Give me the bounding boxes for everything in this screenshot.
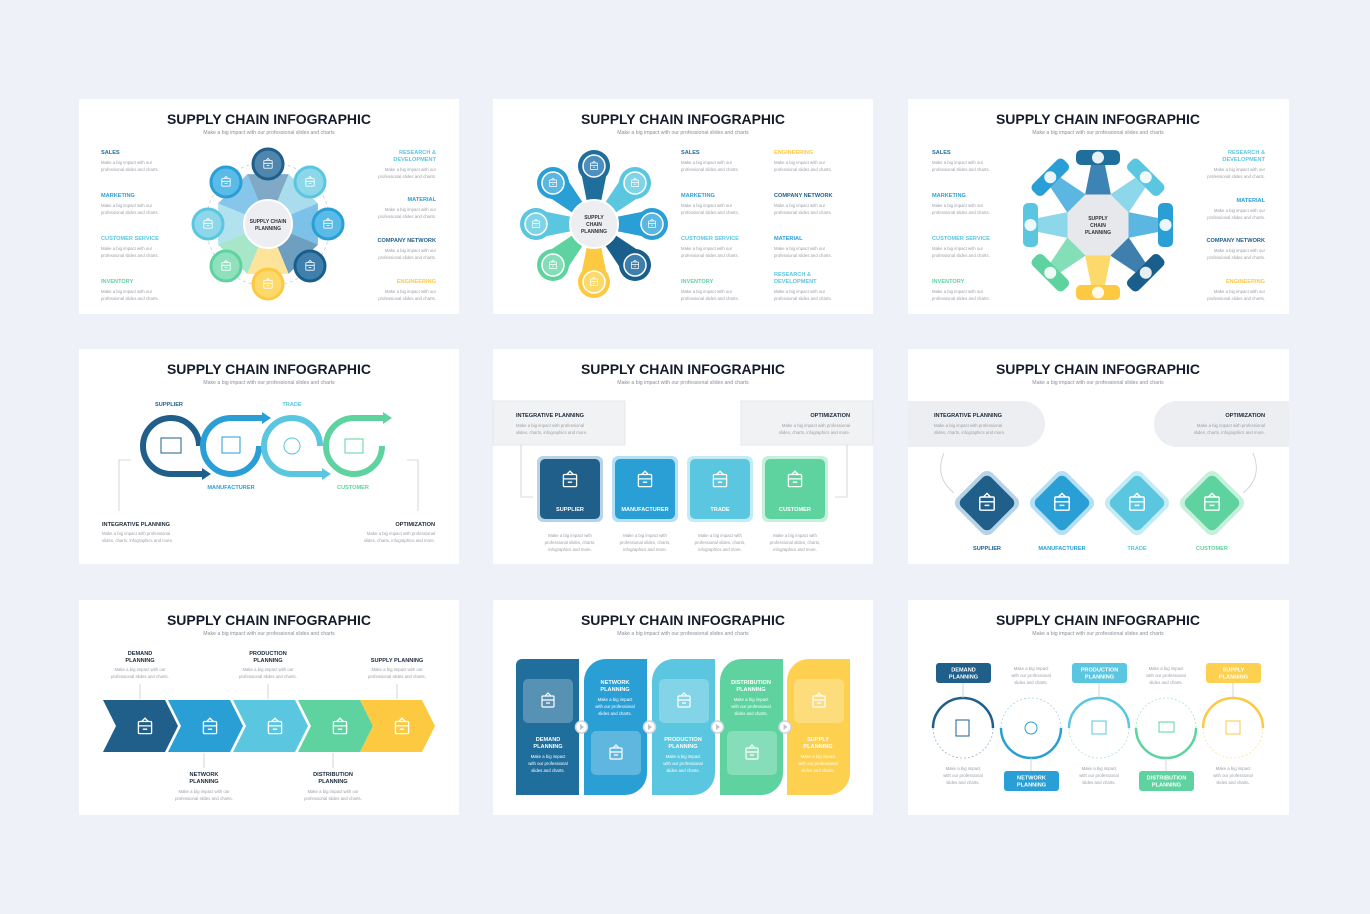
label tags: DEMAND — [951, 668, 976, 674]
columns: Make a big impact — [598, 697, 633, 702]
connector brackets — [119, 460, 418, 511]
columns: DISTRIBUTION — [731, 680, 771, 686]
descriptions: with our professional — [1011, 673, 1051, 678]
left labels: Make a big impact with our — [932, 160, 984, 165]
label column 1: Make a big impact with our — [681, 246, 733, 251]
tile descriptions: professional slides, charts, — [545, 540, 595, 545]
right labels: Make a big impact with our — [385, 248, 437, 253]
title: SUPPLY CHAIN INFOGRAPHIC — [996, 612, 1200, 628]
right labels: RESEARCH & — [399, 150, 436, 156]
columns: with our professional — [798, 761, 838, 766]
label column 2: ENGINEERING — [774, 150, 813, 156]
box: integrative planning: INTEGRATIVE PLANNING — [516, 413, 584, 419]
tile descriptions: professional slides, charts, — [695, 540, 745, 545]
left labels: CUSTOMER SERVICE — [932, 236, 990, 242]
descriptions: with our professional — [1213, 773, 1253, 778]
right labels: Make a big impact with our — [385, 167, 437, 172]
right labels: ENGINEERING — [1226, 279, 1265, 285]
label column 1: MARKETING — [681, 193, 715, 199]
integrative planning text: slides, charts, infographics and more. — [102, 538, 173, 543]
label column 2: Make a big impact with our — [774, 289, 826, 294]
columns: PLANNING — [600, 687, 630, 693]
right labels: professional slides and charts. — [1207, 255, 1265, 260]
right labels: MATERIAL — [1237, 198, 1266, 204]
tile descriptions: Make a big impact with — [623, 533, 667, 538]
optimization text: slides, charts, infographics and more. — [364, 538, 435, 543]
label tags: PLANNING — [949, 674, 978, 680]
left labels: Make a big impact with our — [932, 203, 984, 208]
pill: integrative planning: INTEGRATIVE PLANNING — [934, 413, 1002, 419]
top labels: PRODUCTION — [249, 651, 287, 657]
top labels: SUPPLY PLANNING — [371, 658, 423, 664]
columns: slides and charts. — [801, 768, 835, 773]
play connectors — [576, 721, 791, 733]
right labels — [377, 150, 437, 301]
label tags: SUPPLY — [1223, 668, 1245, 674]
columns: PLANNING — [803, 744, 833, 750]
octagon diagram: PLANNING — [1085, 230, 1111, 236]
top labels: professional slides and charts. — [368, 674, 426, 679]
flower diagram: CHAIN — [586, 222, 602, 228]
box: optimization: slides, charts, infographics and more. — [779, 430, 850, 435]
diamond labels: TRADE — [1127, 546, 1147, 552]
tile descriptions: infographics and more. — [773, 547, 817, 552]
right labels: COMPANY NETWORK — [1206, 238, 1265, 244]
left labels: professional slides and charts. — [101, 296, 159, 301]
right labels: RESEARCH & — [1228, 150, 1265, 156]
wheel diagram: PLANNING — [255, 226, 281, 232]
right labels: professional slides and charts. — [1207, 215, 1265, 220]
subtitle: Make a big impact with our professional slides and charts — [617, 380, 749, 386]
pill: integrative planning: Make a big impact with professional — [934, 423, 1002, 428]
subtitle: Make a big impact with our professional slides and charts — [617, 631, 749, 637]
panel: slide 5 square tiles — [493, 349, 873, 564]
columns: PRODUCTION — [664, 737, 702, 743]
left labels: professional slides and charts. — [101, 210, 159, 215]
title: SUPPLY CHAIN INFOGRAPHIC — [581, 612, 785, 628]
descriptions: Make a big impact — [1149, 666, 1184, 671]
columns: slides and charts. — [734, 711, 768, 716]
label column 1: Make a big impact with our — [681, 289, 733, 294]
step labels: MANUFACTURER — [207, 485, 255, 491]
columns: PLANNING — [533, 744, 563, 750]
bottom labels: professional slides and charts. — [304, 796, 362, 801]
descriptions: Make a big impact — [1014, 666, 1049, 671]
subtitle: Make a big impact with our professional slides and charts — [203, 380, 335, 386]
wheel diagram: SUPPLY CHAIN — [250, 219, 287, 225]
columns: slides and charts. — [531, 768, 565, 773]
label column 1: professional slides and charts. — [681, 210, 739, 215]
title: SUPPLY CHAIN INFOGRAPHIC — [996, 361, 1200, 377]
diamonds — [952, 468, 1247, 538]
flower diagram: SUPPLY — [584, 215, 604, 221]
descriptions: slides and charts. — [946, 780, 980, 785]
tiles: SUPPLIER — [556, 507, 584, 513]
bottom labels: DISTRIBUTION — [313, 772, 353, 778]
label column 2: RESEARCH & — [774, 272, 811, 278]
left labels — [932, 150, 990, 301]
right labels: Make a big impact with our — [1214, 248, 1266, 253]
top labels: professional slides and charts. — [111, 674, 169, 679]
tiles — [537, 456, 828, 522]
descriptions: Make a big impact — [1216, 766, 1251, 771]
descriptions — [943, 666, 1253, 785]
left labels — [101, 150, 159, 301]
subtitle: Make a big impact with our professional slides and charts — [1032, 130, 1164, 136]
left labels: SALES — [932, 150, 951, 156]
columns: Make a big impact — [531, 754, 566, 759]
top labels — [111, 651, 426, 679]
columns: with our professional — [595, 704, 635, 709]
tile descriptions: infographics and more. — [548, 547, 592, 552]
tile descriptions: Make a big impact with — [548, 533, 592, 538]
tile descriptions: Make a big impact with — [698, 533, 742, 538]
columns: with our professional — [528, 761, 568, 766]
label column 1: SALES — [681, 150, 700, 156]
box: integrative planning — [493, 401, 625, 445]
panel: slide 2 flower — [493, 99, 873, 314]
columns: Make a big impact — [734, 697, 769, 702]
descriptions: slides and charts. — [1216, 780, 1250, 785]
pill: optimization — [1154, 401, 1289, 447]
label column 2: COMPANY NETWORK — [774, 193, 833, 199]
label column 2: professional slides and charts. — [774, 253, 832, 258]
step labels — [155, 402, 369, 491]
label column 2: professional slides and charts. — [774, 296, 832, 301]
label column 1 — [681, 150, 739, 301]
bottom labels: NETWORK — [190, 772, 218, 778]
pill: optimization: Make a big impact with professional — [1197, 423, 1265, 428]
label column 1: CUSTOMER SERVICE — [681, 236, 739, 242]
label column 2: professional slides and charts. — [774, 210, 832, 215]
optimization text: OPTIMIZATION — [395, 522, 435, 528]
icons — [161, 437, 363, 454]
columns: Make a big impact — [666, 754, 701, 759]
label tags: PRODUCTION — [1081, 668, 1118, 674]
pill: integrative planning — [908, 401, 1045, 447]
pill: optimization: slides, charts, infographics and more. — [1194, 430, 1265, 435]
top labels: PLANNING — [125, 658, 155, 664]
right labels: Make a big impact with our — [1214, 289, 1266, 294]
right labels: Make a big impact with our — [1214, 167, 1266, 172]
left labels: professional slides and charts. — [932, 210, 990, 215]
left labels: professional slides and charts. — [932, 167, 990, 172]
title: SUPPLY CHAIN INFOGRAPHIC — [581, 361, 785, 377]
label tags: PLANNING — [1152, 782, 1181, 788]
right labels: professional slides and charts. — [378, 214, 436, 219]
label column 2: DEVELOPMENT — [774, 279, 817, 285]
step labels: SUPPLIER — [155, 402, 183, 408]
label tags: DISTRIBUTION — [1147, 776, 1186, 782]
top labels: Make a big impact with our — [242, 667, 294, 672]
label column 2 — [774, 150, 833, 301]
panel: slide 6 diamonds — [908, 349, 1289, 564]
columns: with our professional — [731, 704, 771, 709]
bottom labels: PLANNING — [189, 779, 219, 785]
descriptions: slides and charts. — [1082, 780, 1116, 785]
left labels: INVENTORY — [101, 279, 134, 285]
left labels: professional slides and charts. — [101, 253, 159, 258]
columns — [516, 659, 850, 795]
descriptions: Make a big impact — [946, 766, 981, 771]
diamond labels: SUPPLIER — [973, 546, 1001, 552]
columns: PLANNING — [668, 744, 698, 750]
box: integrative planning: slides, charts, infographics and more. — [516, 430, 587, 435]
columns: slides and charts. — [598, 711, 632, 716]
left labels: Make a big impact with our — [101, 246, 153, 251]
octagon diagram: SUPPLY — [1088, 216, 1108, 222]
right labels: professional slides and charts. — [378, 174, 436, 179]
label tags — [936, 663, 1261, 791]
label tags: PLANNING — [1219, 674, 1248, 680]
panel: slide 9 circle timeline — [908, 600, 1289, 815]
top labels: Make a big impact with our — [371, 667, 423, 672]
subtitle: Make a big impact with our professional slides and charts — [1032, 631, 1164, 637]
right labels: DEVELOPMENT — [393, 157, 437, 163]
panel: slide 1 radial wheel — [79, 99, 459, 314]
title: SUPPLY CHAIN INFOGRAPHIC — [167, 612, 371, 628]
pill: integrative planning: slides, charts, infographics and more. — [934, 430, 1005, 435]
columns: with our professional — [663, 761, 703, 766]
bottom labels: Make a big impact with our — [307, 789, 359, 794]
label tags: PLANNING — [1085, 674, 1114, 680]
label column 1: Make a big impact with our — [681, 160, 733, 165]
descriptions: slides and charts. — [1014, 680, 1048, 685]
right labels: Make a big impact with our — [1214, 208, 1266, 213]
top labels: Make a big impact with our — [114, 667, 166, 672]
bottom labels: Make a big impact with our — [178, 789, 230, 794]
panel: slide 4 circular arrows — [79, 349, 459, 564]
left labels: professional slides and charts. — [932, 253, 990, 258]
panel: slide 8 columns — [493, 600, 873, 815]
columns: PLANNING — [736, 687, 766, 693]
left labels: MARKETING — [101, 193, 135, 199]
label column 2: MATERIAL — [774, 236, 803, 242]
label column 1: Make a big impact with our — [681, 203, 733, 208]
tile descriptions — [545, 533, 820, 552]
left labels: Make a big impact with our — [101, 203, 153, 208]
right labels: COMPANY NETWORK — [377, 238, 436, 244]
left labels: Make a big impact with our — [932, 246, 984, 251]
flower diagram — [520, 150, 668, 298]
descriptions: with our professional — [1146, 673, 1186, 678]
subtitle: Make a big impact with our professional slides and charts — [203, 130, 335, 136]
circles — [933, 698, 1263, 758]
bottom labels: PLANNING — [318, 779, 348, 785]
label column 1: professional slides and charts. — [681, 167, 739, 172]
label column 1: professional slides and charts. — [681, 296, 739, 301]
left labels: SALES — [101, 150, 120, 156]
label column 2: Make a big impact with our — [774, 246, 826, 251]
top labels: professional slides and charts. — [239, 674, 297, 679]
label tags: NETWORK — [1017, 776, 1046, 782]
optimization text — [364, 522, 435, 543]
right labels: professional slides and charts. — [378, 296, 436, 301]
columns: SUPPLY — [807, 737, 829, 743]
diamond labels: CUSTOMER — [1196, 546, 1228, 552]
title: SUPPLY CHAIN INFOGRAPHIC — [167, 361, 371, 377]
left labels: professional slides and charts. — [932, 296, 990, 301]
label column 1: INVENTORY — [681, 279, 714, 285]
tile descriptions: infographics and more. — [698, 547, 742, 552]
left labels: Make a big impact with our — [101, 289, 153, 294]
box: optimization: Make a big impact with professional — [782, 423, 850, 428]
right labels — [1206, 150, 1266, 301]
left labels: MARKETING — [932, 193, 966, 199]
subtitle: Make a big impact with our professional slides and charts — [1032, 380, 1164, 386]
descriptions: slides and charts. — [1149, 680, 1183, 685]
tile descriptions: infographics and more. — [623, 547, 667, 552]
integrative planning text — [102, 522, 173, 543]
descriptions: with our professional — [943, 773, 983, 778]
left labels: Make a big impact with our — [932, 289, 984, 294]
right labels: Make a big impact with our — [385, 289, 437, 294]
tile descriptions: Make a big impact with — [773, 533, 817, 538]
diamond labels: MANUFACTURER — [1038, 546, 1086, 552]
title: SUPPLY CHAIN INFOGRAPHIC — [581, 111, 785, 127]
panel: slide 3 octagon — [908, 99, 1289, 314]
left labels: CUSTOMER SERVICE — [101, 236, 159, 242]
columns: NETWORK — [601, 680, 629, 686]
box: integrative planning: Make a big impact with professional — [516, 423, 584, 428]
step labels: TRADE — [282, 402, 302, 408]
label column 1: professional slides and charts. — [681, 253, 739, 258]
panel: slide 7 chevrons — [79, 600, 459, 815]
optimization text: Make a big impact with professional — [367, 531, 435, 536]
right labels: professional slides and charts. — [1207, 174, 1265, 179]
right labels: DEVELOPMENT — [1222, 157, 1266, 163]
tile descriptions: professional slides, charts, — [620, 540, 670, 545]
right labels: MATERIAL — [408, 197, 437, 203]
label tags: PLANNING — [1017, 782, 1046, 788]
right labels: ENGINEERING — [397, 279, 436, 285]
pill: optimization: OPTIMIZATION — [1225, 413, 1265, 419]
label column 2: professional slides and charts. — [774, 167, 832, 172]
bottom labels: professional slides and charts. — [175, 796, 233, 801]
left labels: Make a big impact with our — [101, 160, 153, 165]
box: optimization: OPTIMIZATION — [810, 413, 850, 419]
right labels: Make a big impact with our — [385, 207, 437, 212]
octagon diagram — [1023, 150, 1173, 300]
subtitle: Make a big impact with our professional slides and charts — [203, 631, 335, 637]
left labels: INVENTORY — [932, 279, 965, 285]
columns: DEMAND — [536, 737, 560, 743]
tiles: CUSTOMER — [779, 507, 811, 513]
flower diagram: PLANNING — [581, 229, 607, 235]
integrative planning text: INTEGRATIVE PLANNING — [102, 522, 170, 528]
step labels: CUSTOMER — [337, 485, 369, 491]
tiles: TRADE — [710, 507, 730, 513]
right labels: professional slides and charts. — [1207, 296, 1265, 301]
title: SUPPLY CHAIN INFOGRAPHIC — [996, 111, 1200, 127]
right labels: professional slides and charts. — [378, 255, 436, 260]
box: optimization — [741, 401, 873, 445]
arrow chain — [143, 412, 392, 480]
wheel diagram — [193, 149, 343, 299]
chevron row — [103, 700, 435, 752]
columns: slides and charts. — [666, 768, 700, 773]
title: SUPPLY CHAIN INFOGRAPHIC — [167, 111, 371, 127]
descriptions: Make a big impact — [1082, 766, 1117, 771]
label column 2: Make a big impact with our — [774, 160, 826, 165]
left labels: professional slides and charts. — [101, 167, 159, 172]
columns: Make a big impact — [801, 754, 836, 759]
octagon diagram: CHAIN — [1090, 223, 1106, 229]
bottom labels — [175, 772, 362, 801]
descriptions: with our professional — [1079, 773, 1119, 778]
top labels: DEMAND — [128, 651, 152, 657]
label column 2: Make a big impact with our — [774, 203, 826, 208]
tile descriptions: professional slides, charts, — [770, 540, 820, 545]
tiles: MANUFACTURER — [621, 507, 669, 513]
integrative planning text: Make a big impact with professional — [102, 531, 170, 536]
top labels: PLANNING — [253, 658, 283, 664]
diamond labels — [973, 546, 1228, 552]
subtitle: Make a big impact with our professional slides and charts — [617, 130, 749, 136]
